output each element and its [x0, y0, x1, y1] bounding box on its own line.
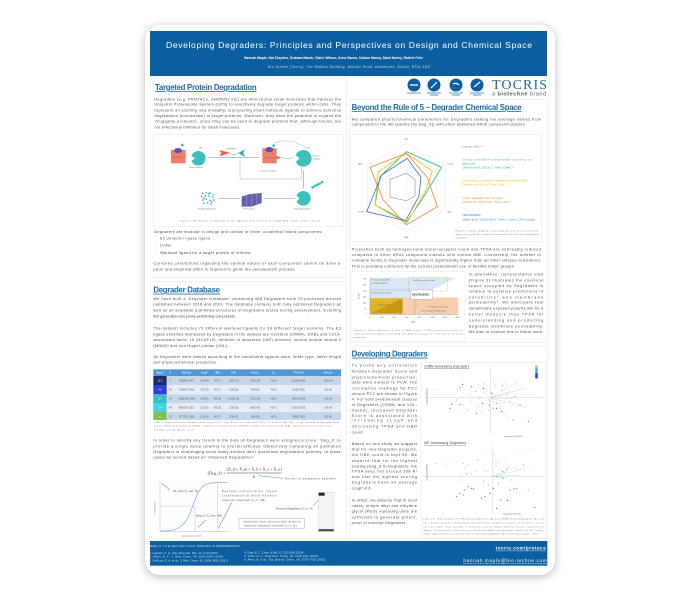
PCA text: that for new Degrader projects, — [352, 447, 417, 451]
table 1: physicochemical properties: ≥5.0 — [158, 379, 163, 382]
database text: All Degraders were ranked according to the constituent ligands used, linker type, linker length — [153, 355, 341, 359]
table 1: physicochemical properties: 4.7(1-9) — [200, 390, 209, 392]
chart: dose response curve: Degrader concentration: lowest — [222, 489, 277, 493]
table 1: physicochemical properties: TPSA (Å²) — [293, 372, 304, 375]
references: 4. Doak, B. C., Chem. & Biol. 21, 1115-1142 (2014) — [244, 550, 303, 554]
properties text: This is probably conferred by the current predominant use of flexible linker groups. — [352, 264, 515, 268]
intro text: Degraders (e.g. PROTACs, SNIPERs etc) are bifunctional small molecules that harness the — [154, 97, 341, 101]
PCA text: To probe any correlation — [352, 364, 417, 368]
scoring text: provide a single value relating to overall efficacy. Objectively comparing all published — [153, 444, 341, 448]
table 1: physicochemical properties: 24(10-40) — [250, 408, 260, 410]
references: Maple, H. J et al. Med. Chem. Comm. (2019) DOI: 10.1039/C9MD00272C — [150, 544, 240, 548]
table 1: physicochemical properties: 93 — [169, 399, 172, 401]
figure 3: MW vs TPSA plot: 100 — [363, 302, 367, 304]
figure 3: MW vs TPSA plot: 400 — [392, 317, 397, 319]
header banner — [150, 31, 547, 76]
figure 3: MW vs TPSA plot: 600 — [405, 317, 409, 319]
alternative view text: relation to putative predictions of — [469, 290, 544, 294]
callout: incubation time: maximum response observed (t_m, hr) — [244, 524, 297, 528]
figure 3: MW vs TPSA plot: 0 — [369, 317, 371, 319]
chart: dose response curve: [Deg_S / C_max, nM] — [196, 513, 222, 517]
contact links: hannah.maple@bio-techne.com — [463, 558, 547, 563]
radar legend: Lipinski Ro5 ¹⁻² — [462, 144, 484, 148]
PCA text: cLogP of 6. — [352, 486, 372, 490]
PCA text: scoring (Deg_S 5) Degraders, the — [352, 464, 417, 468]
table 1: physicochemical properties: 4(3-5) — [271, 390, 277, 392]
figure 2: radar diagram: TPSA — [358, 211, 364, 214]
heading: Targeted Protein Degradation — [155, 83, 257, 92]
figure 3: MW vs TPSA plot — [351, 272, 465, 341]
panel: Targeted Protein Degradation — [150, 79, 347, 277]
PCA plot: CRBN: CRBN-harnessing Degraders — [424, 364, 470, 368]
table 1: physicochemical properties: 4(3-7) — [271, 416, 277, 418]
figure 2: radar diagram: MW — [404, 138, 409, 140]
figure 4 caption: larger angle indicates increasing inverse correlation (opposite sides of the plot; angle > 90°). — [423, 533, 539, 536]
references: 6. Perry, B. et al., Top. Biomol. Chem., 68, 7759-7793 (2015) — [244, 558, 325, 562]
callout: incubation time: Incubation time: shortest time at which — [243, 519, 301, 523]
table 1: physicochemical properties: Deg_S — [156, 373, 164, 375]
figure 3: MW vs TPSA plot: Predicted Solubility — [371, 279, 391, 282]
PCA text: glycol (PEG) repeating units are — [352, 510, 417, 514]
intro text — [352, 117, 541, 127]
figure 4 caption: Figure 4. PCA analysis of VHL-based Degraders (A) and CRBN-based Degraders (B). The — [423, 518, 545, 521]
table 1: physicochemical properties: 4.9(0-9) — [200, 399, 209, 401]
components list: Linker — [160, 243, 172, 247]
figure 1: mechanism of degrader action: complex — [312, 159, 321, 161]
PCA text: TPSA does not exceed 268 Å² — [352, 469, 418, 474]
figure 4 caption — [423, 518, 545, 536]
PCA text: proof of concept Degraders. — [352, 521, 407, 525]
figure 1: mechanism of degrader action: E3 Ligase — [264, 158, 275, 160]
table 1: physicochemical properties: 15(14-17) — [229, 380, 239, 382]
table 1: physicochemical properties: 199(143-333) — [291, 399, 306, 401]
intro text: compounds in the 4th quartile [by Deg_S]) with other published bRo5 compound classes. — [352, 123, 526, 127]
figure 1: mechanism of degrader action: Ternary Complex — [260, 169, 277, 172]
heading: Degrader Database — [153, 286, 221, 295]
PCA text: 4. For both predominant classes — [352, 398, 417, 402]
footer banner — [149, 541, 547, 566]
panel: Developing Degraders — [350, 346, 547, 539]
PCA text: cases, simple alkyl and ethylene — [352, 504, 417, 508]
PCA text: correlation loadings for PC1 — [352, 386, 417, 390]
table 1: physicochemical properties: 4-5 — [158, 390, 162, 392]
contact links: tocris.com/protacs — [496, 546, 546, 551]
PCA plot: IAP — [424, 441, 543, 515]
figure 1: mechanism of degrader action: Degrader — [227, 147, 236, 150]
table 1: physicochemical properties: 966(759-1231) — [179, 408, 195, 410]
alternative view text: understanding and predicting — [469, 318, 543, 322]
table 1: physicochemical properties: 4.9(4-6) — [200, 380, 209, 382]
table 1: physicochemical properties: 15(9-20) — [229, 390, 238, 392]
table caption: donors (HBD) and acceptors (HBA), number of rotatable bonds (NRotB), number of aromatic rings (SA), topological polar surface area — [154, 425, 333, 428]
PCA text: physicochemical properties, — [352, 375, 417, 379]
radar caption — [456, 230, 539, 240]
PCA plot: IAP: Component 1 (37.5%) — [503, 512, 521, 515]
table 1: physicochemical properties: 9(4-14) — [325, 408, 332, 410]
figure 1: mechanism of degrader action: Polyubiquitination — [293, 207, 311, 210]
PCA text: Score is associated with — [352, 414, 417, 418]
database text: The dataset includes 70 different warhead ligands for 39 different target proteins. The E3 — [153, 327, 341, 331]
table 1: physicochemical properties: HBD — [215, 373, 220, 375]
authors: Hannah Maple, Nat Clayden, Graham Marsh, Claire Wilson, Anne Baron, Callum Macey, Mark Norley, Robert Felix — [244, 56, 423, 60]
figure 1: mechanism of degrader action: E3 Ligase — [173, 157, 183, 159]
figure 1: mechanism of degrader action — [153, 134, 343, 227]
PCA text: observe that for the highest — [352, 459, 418, 463]
figure 2: radar diagram: HBA — [404, 236, 409, 239]
table 1: physicochemical properties: 4(3-7) — [271, 399, 277, 401]
heading: Developing Degraders — [352, 350, 428, 359]
PCA text: between Degrader Score and — [352, 369, 417, 373]
PCA plot: CRBN: Component 1 (43.5%) — [504, 435, 523, 438]
figure 1: mechanism of degrader action: Proteasome — [243, 207, 256, 210]
database text: associated factor 15 (DCAF15), inhibitor of apoptosis (IAP) proteins; murine double minute 2 — [153, 338, 341, 342]
scoring text: In order to identify any trends in the data all Degraders were assigned a score: 'Deg_S' to — [153, 439, 341, 443]
table 1: physicochemical properties: 46 — [169, 390, 172, 392]
PCA text: and that the highest scoring — [352, 475, 417, 479]
figure 3: MW vs TPSA plot: 200 — [363, 290, 367, 292]
Deg_S formula: 5 — [253, 474, 256, 479]
western blot: Observed Degradation (C_m, %) — [276, 506, 313, 510]
table 1: physicochemical properties: cLogP — [201, 373, 208, 375]
figure 3: MW vs TPSA plot: Oral Macrocyclic Drugs — [413, 279, 435, 282]
PCA text: Based on this study we suggest — [352, 442, 418, 446]
figure 2: radar diagram — [350, 134, 542, 241]
logo: Tocris: TOCRIS — [492, 78, 547, 93]
intro text: degradation (knockdown) of target proteins. Moreover, they have the potential to expand the — [154, 114, 341, 118]
alternative view text: In alternative, representative view — [469, 273, 544, 277]
figure 1: mechanism of degrader action: Peptide Fragments — [198, 207, 216, 210]
PCA text: of Degraders (CRBN- and VHL- — [352, 403, 418, 407]
components list: Warhead ligand for a target protein of interest — [160, 251, 252, 255]
radar legend: Orally available compounds focusing on — [462, 158, 532, 162]
figure 3: MW vs TPSA plot: 250 — [363, 284, 367, 286]
references: 5. Vidal, D. J., Drug Disc. Today. 20, 1104-1111 (2015) — [244, 554, 318, 558]
database text: well as all available published structures of Degraders tested during development, including — [153, 309, 341, 313]
alternative view text: We plan to explore this in future work. — [469, 330, 543, 334]
database text: and physicochemical properties. — [153, 361, 217, 365]
figure 1: mechanism of degrader action: E3 — [307, 148, 310, 150]
table 1: physicochemical properties: N — [169, 373, 171, 375]
table 1: physicochemical properties: 935(675-1340) — [179, 390, 195, 392]
table 1: physicochemical properties: 15(9-17) — [229, 416, 238, 418]
table 1: physicochemical properties: 214(135-279) — [291, 408, 306, 410]
PCA text: based), increased Degrader — [352, 409, 418, 413]
Deg_S formula — [207, 466, 337, 481]
PCA plot: CRBN — [424, 364, 543, 438]
table caption: Table 1: Physicochemical property data across the 5 Deg_S classes, with mean (95% CI) of mean MW (Da), cLogP, number of hydrogen bond — [154, 421, 340, 424]
contact links — [463, 546, 547, 563]
alternative view text: Degrader membrane permeability. — [469, 324, 543, 328]
scoring text — [153, 439, 341, 460]
radar legend: Vidal et al. (2015) Nat. Comm. Biol.⁴ — [462, 200, 512, 204]
PCA text — [352, 364, 418, 525]
table 1: physicochemical properties: 4(3-7) — [214, 380, 221, 382]
alternative view text: space occupied by Degraders in — [469, 284, 543, 288]
table 1: physicochemical properties: 15(9-20) — [229, 408, 238, 410]
PCA text: the HBD count is kept ≤5. We — [352, 453, 417, 457]
figure 1: mechanism of degrader action: Ternary — [312, 155, 320, 158]
callout: incubation time — [239, 518, 304, 528]
figure 3: MW vs TPSA plot: Extended Cell Space — [371, 292, 392, 295]
figure 1: mechanism of degrader action: Figure 1. Mechanism of Degrader action. Adapted from Toure et al. (2016) Med. Chem. Comm. 7(1):20 — [180, 219, 321, 222]
closing text: Currently, predictions regarding the optimal nature of each component cannot be done a — [153, 261, 341, 265]
references: 3. DeGoey, D. A. et al., J. Med. Chem. 61, 2636-2651 (2017) — [149, 558, 228, 562]
logo: Tocris: a biotechne brand — [492, 92, 546, 98]
figure 3: MW vs TPSA plot: 50 — [364, 308, 367, 310]
properties text — [352, 248, 542, 268]
chart: dose response curve: concentration at which maximum — [222, 493, 277, 497]
properties text: rotatable bonds in Degrader molecules is significantly higher than all other classes considered. — [352, 259, 541, 263]
table 1: physicochemical properties: MW (Da) — [182, 373, 192, 375]
figure 4 caption: each axis label. Each variable is shown as a vector. Angles between vectors indicate their — [423, 525, 545, 528]
figure 3: MW vs TPSA plot: 150 — [363, 296, 367, 298]
table 1: physicochemical properties: 9(2-14) — [325, 416, 332, 418]
components list — [154, 230, 323, 255]
references: 1. Lipinski, C. A., Adv. Drug Del. Rev. 23, 3-25 (1997) — [149, 551, 218, 555]
table 1: physicochemical properties: 4(3-10) — [214, 408, 221, 410]
table 1: physicochemical properties: 5.1(0-9) — [200, 416, 209, 418]
Deg_S formula: Number of parameters available — [285, 477, 337, 481]
alternative view text: dynamically exposed polarity will be a — [469, 306, 544, 310]
figure 2: radar diagram: NRot — [358, 163, 363, 166]
PCA plot: CRBN: Component 2 (18.0%) — [425, 388, 428, 405]
PCA plot: IAP: IAP-harnessing Degraders — [424, 441, 466, 445]
panel: Degrader Database — [150, 282, 347, 540]
table 1: physicochemical properties: 10(4-14) — [324, 380, 333, 382]
figure 4 caption: degree of correlation. Positively correlated variables are grouped together (< 90° angle); — [423, 529, 545, 532]
figure 2: radar diagram: cLogP — [447, 164, 454, 166]
table 1: physicochemical properties: 9(2-14) — [325, 399, 332, 401]
Deg_S formula: ⟨Deg_S⟩ = — [207, 470, 226, 475]
alternative view text: solubility⁵ and membrane — [469, 295, 543, 299]
table 1: physicochemical properties: Ali/Arom. — [324, 372, 333, 375]
radar legend: Maple et al. (2019) Med. Chem. Comm. (This study) — [462, 217, 535, 221]
PCA text: versus PC2 are shown in Figure — [352, 392, 417, 396]
table 1: physicochemical properties: 84 — [169, 408, 172, 410]
intro text: 'druggable proteome', since they can be used to degrade proteins that, although bound, are — [154, 120, 341, 124]
figure 3: MW vs TPSA plot: molecules. — [353, 337, 367, 339]
PCA text: count. — [352, 431, 364, 435]
database text: We have built a 'Degrader Database' containing 488 Degraders from 70 published articles — [153, 297, 341, 301]
figure 1: mechanism of degrader action: E3 — [200, 148, 203, 150]
table 1: physicochemical properties: 4(3-7) — [271, 408, 277, 410]
scoring text: cases we scored based on 'Observed Degradation'. — [153, 456, 255, 460]
table 1: physicochemical properties: ≤1 — [159, 415, 162, 418]
table caption: (TPSA) and Ali/Arom ratio. — [154, 428, 195, 431]
radar legend: Debony et al. (2018) J. Med. Chem.³ — [462, 166, 513, 170]
radar caption: analyses. — [456, 238, 467, 240]
database text: (MDM2) and Von Hippel-Lindau (VHL). — [153, 344, 228, 348]
table caption — [154, 421, 340, 431]
radar caption: Figure 2: Radar diagram illustrating quartile data of chemical — [456, 230, 539, 233]
table 1: physicochemical properties: HBA — [231, 372, 237, 375]
table 1: physicochemical properties: 2-3 — [158, 408, 162, 410]
table 1: physicochemical properties: 22(18-28) — [250, 380, 260, 382]
table 1: physicochemical properties: 4(3-7) — [214, 416, 221, 418]
alternative view text: better measure than TPSA for — [469, 312, 544, 316]
figure 3: MW vs TPSA plot: Figure 3: Representative graph of MW versus TPSA illustrating areas of — [353, 329, 463, 332]
components list: - — [155, 251, 157, 255]
PCA text: data were subject to PCA. The — [352, 381, 417, 385]
table 1: physicochemical properties: 3-4 — [158, 399, 162, 401]
closing text — [153, 261, 341, 271]
affiliation: Bio-Techne (Tocris), The Watkins Building, Atlantic Road, Avonmouth, Bristol, BS11 9QD — [268, 65, 431, 69]
components list: - — [155, 243, 157, 247]
table 1: physicochemical properties: 1018(766-1340) — [178, 399, 195, 401]
radar caption: space occupied by compounds classed from different published — [456, 233, 539, 236]
figure 3: MW vs TPSA plot: 200 — [380, 317, 384, 319]
chart: dose response curve: ligand concentration — [182, 534, 202, 537]
figure 4: PCA plots — [421, 363, 546, 537]
PCA text: decreasing TPSA and HBD — [352, 425, 417, 429]
radar legend — [462, 144, 535, 221]
PCA text: Degraders have an average — [352, 481, 417, 485]
radar legend: Oral drugs contrast to marketed beyond Ro5 — [462, 178, 528, 182]
table 1: physicochemical properties: 4(3-7) — [214, 390, 221, 392]
references — [149, 544, 325, 562]
properties text: compared to other bRo5 compound classes with similar MW. Conversely, the number of — [352, 253, 542, 257]
figure 3: MW vs TPSA plot: 300 — [363, 278, 367, 280]
table 1: physicochemical properties: 17 — [169, 380, 172, 382]
logo: Tocris — [407, 78, 547, 98]
table 1: physicochemical properties: 213(189-268) — [291, 380, 306, 382]
table 1: physicochemical properties: 122 — [168, 416, 173, 418]
title: Developing Degraders: Principles and Perspectives on Design and Chemical Space — [166, 40, 532, 50]
PCA plot: IAP: Component 2 (18.8%) — [425, 464, 428, 481]
table 1: physicochemical properties: 977(702-1235) — [179, 416, 195, 418]
figure 3: MW vs TPSA plot: Upload Cell — [378, 305, 390, 307]
figure 2: radar diagram: HBD — [447, 212, 452, 214]
intro text: not effectively inhibited by small molecules. — [154, 126, 240, 130]
western blot — [276, 492, 334, 532]
table 1: physicochemical properties: 214(97-281) — [292, 390, 305, 392]
PCA text: increasing cLogP and — [352, 419, 417, 423]
table 1: physicochemical properties: SA — [272, 372, 276, 375]
intro text: Ubiquitin Proteasome System (UPS) to selectively degrade target proteins within cells. They — [154, 103, 341, 107]
chart: dose response curve: (D_max / C_max, %) — [173, 489, 198, 493]
table 1: physicochemical properties: 198(97-281) — [292, 416, 305, 418]
figure 3: MW vs TPSA plot: Predicted membrane — [428, 306, 449, 309]
Deg_S formula: (X_d + X_m + X_b + X_c + X_e) — [227, 466, 282, 471]
figure 3: MW vs TPSA plot: TPSA — [357, 293, 360, 299]
PCA text: In effect, we observe that in most — [352, 499, 418, 503]
figure 3: MW vs TPSA plot: (TPSA≥0.25MW) — [371, 282, 388, 285]
alternative view text — [469, 273, 544, 334]
table 1: physicochemical properties: N Rot B — [251, 372, 260, 375]
table 1: physicochemical properties: 5.1(2-9) — [200, 408, 209, 410]
radar legend: DEGRADERS — [462, 213, 481, 217]
figure 3: MW vs TPSA plot: chemical-formula space associated with different properties and classes of small — [353, 332, 463, 335]
table 1: physicochemical properties: 4(3-10) — [214, 399, 221, 401]
radar legend: Orally available macrocycles — [462, 196, 503, 200]
figure 3: MW vs TPSA plot: 1400 — [455, 317, 460, 319]
components list: Degraders are modular in design and consist of three, covalently linked components: — [154, 230, 323, 234]
panel: Beyond the Rule of 5 — [350, 99, 547, 343]
table 1: physicochemical properties: 4(3-6) — [271, 380, 277, 382]
chart: dose response curve: response observed (C_m, µM) — [222, 498, 265, 502]
figure 3: MW vs TPSA plot: MW — [411, 322, 416, 324]
figure 3: MW vs TPSA plot: 800 — [418, 317, 422, 319]
figure 3: MW vs TPSA plot: 0 — [366, 314, 368, 316]
intro text: represent an exciting new modality, repurposing small molecule ligands to achieve selective — [154, 108, 341, 112]
figure 3: MW vs TPSA plot: permeability (TPSA≤140) — [422, 310, 446, 313]
table 1: physicochemical properties — [153, 369, 341, 420]
properties text: Properties such as hydrogen bond donor/acceptor count and TPSA are noticeably reduced — [352, 248, 541, 252]
table 1: physicochemical properties: 14.5(8-23) — [228, 399, 239, 401]
table 1: physicochemical properties: 24(9-39) — [251, 416, 260, 418]
figure 3: MW vs TPSA plot: DEGRADERS — [412, 292, 429, 296]
figure 1: mechanism of degrader action: Target Protein — [189, 166, 203, 169]
intro text: We compared physicochemical parameters for Degraders (taking the average values from — [352, 117, 541, 121]
database text — [153, 297, 342, 365]
figure 3: MW vs TPSA plot: 1000 — [430, 317, 436, 319]
radar legend: ligand use — [462, 162, 475, 166]
intro text — [154, 97, 341, 130]
components list: E3 Ubiquitin ligase ligand — [160, 237, 210, 241]
database text: published between 2018 and 2019. The database contains both fully optimised Degraders as — [153, 303, 341, 307]
table 1: physicochemical properties: 24(9-38) — [251, 390, 260, 392]
alternative view text: (Figure 3) illustrates the chemical — [469, 278, 543, 282]
poster card — [145, 25, 555, 575]
heading: Beyond the Rule of 5 – Degrader Chemical Space — [352, 103, 522, 112]
PCA text: sufficient to generate potent, — [352, 515, 417, 519]
database text: ligase enzymes harnessed by Degraders in the dataset are Cereblon (CRBN), DDB1 and CUL4- — [153, 332, 342, 336]
references: 2. Veber, D. F., J. Med. Chem. 45, 2615-2623 (2002) — [149, 555, 223, 559]
radar legend: Doak et al. (2014) Chem. Biol.³ — [462, 182, 506, 186]
database text: first generation and poorly performing compounds. — [153, 314, 236, 318]
table 1: physicochemical properties: 9(2-14) — [325, 390, 332, 392]
figure 4 caption: percentage variance explained by each principal component is given in brackets, next to — [423, 521, 545, 524]
chart: dose response curve — [153, 482, 277, 537]
scoring text: Degraders is challenging since many studies don't quantitate degradation potency. In these — [153, 450, 341, 454]
figure 3: MW vs TPSA plot: 1200 — [442, 317, 448, 319]
alternative view text: permeability⁶. We anticipate that — [469, 301, 544, 305]
chart: dose response curve: % degradation — [153, 500, 156, 515]
table 1: physicochemical properties: 953(890-1477) — [179, 380, 195, 382]
table 1: physicochemical properties: 27(13-39) — [250, 399, 260, 401]
closing text: priori and empirical effort is required to guide the development process. — [153, 267, 296, 271]
